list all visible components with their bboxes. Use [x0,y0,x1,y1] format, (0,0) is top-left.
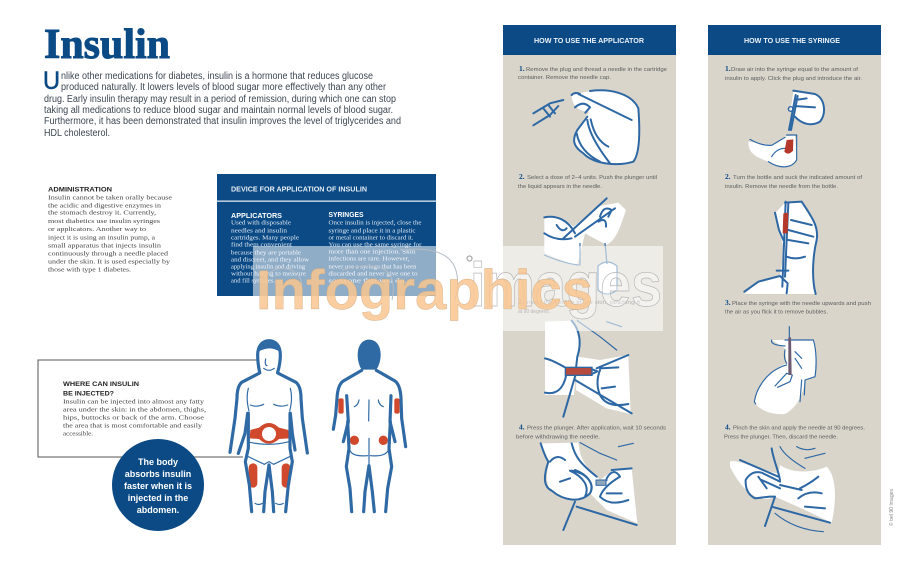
syringe step 3 text: 3. [725,298,731,307]
panel heading: DEVICE FOR APPLICATION OF INSULIN [231,186,367,194]
syringe header: HOW TO USE THE SYRINGE [744,38,840,45]
applicator step 3 text: at 90 degrees. [518,309,550,315]
callout circle: absorbs insulin [125,469,191,479]
applicator step 2 text: 2. [519,172,525,181]
applicator step 1 text: Remove the plug and thread a needle in the cartridge [526,67,667,73]
administration text block: ADMINISTRATION [48,186,112,194]
callout circle [112,439,204,531]
callout: where can insulin be injected: BE INJECTED? [63,390,114,398]
syringe step 4 illustration [730,447,835,532]
syringe step 1 text: 1. [725,64,731,73]
applicators column: without having to measure [231,270,306,278]
applicator step 4 text: 4. [519,422,525,432]
applicator step 3 text: 3. [518,297,524,306]
callout: where can insulin be injected: WHERE CAN INSULIN [63,381,139,388]
administration text block: those with type 1 diabetes. [48,266,131,274]
intro text block: taking all medications to reduce blood sugar and maintain normal levels of blood sugar. [44,105,393,116]
syringe step 3 text: Place the syringe with the needle upwards and push [732,301,871,307]
intro text block: drug. Early insulin therapy may result in a period of remission, during which one can stop [44,94,396,105]
callout: where can insulin be injected [38,360,257,457]
syringes column: someone that you do. [328,278,407,284]
applicator step 2 text [518,172,657,190]
callout circle: faster when it is [124,481,192,491]
syringe step 2 text: insulin. Remove the needle from the bottle. [725,184,838,190]
applicators column [231,213,309,284]
panel: how to use the applicator [503,25,676,545]
intro text block [43,67,401,139]
callout circle: abdomen. [137,505,179,515]
applicator step 3 illustration [545,321,632,417]
callout circle: injected in the [128,493,188,503]
applicator step 3 needle and cartridge [598,243,617,294]
applicator header [503,25,676,55]
callout: where can insulin be injected: hips, buttocks or back of the arm. Choose [63,414,204,422]
administration text block: continuously through a needle placed [48,250,169,258]
syringes column: or metal container to discard it. [328,234,414,242]
syringes column: Once insulin is injected, close the [328,220,422,226]
syringe header [708,25,881,55]
syringe step 4 text: Pinch the skin and apply the needle at 90 degrees. [733,426,865,432]
callout: where can insulin be injected: area under the skin: in the abdomen, thighs, [63,406,206,414]
administration text block: under the skin. It is used especially by [48,258,171,266]
administration text block: inject it is using an insulin pump, a [48,234,155,242]
body diagram: back [333,340,406,512]
applicator step 1 illustration [533,90,639,164]
syringes column: discarded and never give one to [328,270,418,278]
syringe step 1 text: Draw air into the syringe equal to the amount of [731,67,858,73]
applicators column: and discreet, and they allow [231,256,309,264]
syringes column [328,212,422,284]
callout: where can insulin be injected: Insulin can be injected into almost any fatty [63,398,205,406]
watermark: images [470,251,662,320]
applicator step 4 text [516,422,666,440]
syringes column: more than one injection. Skin [328,248,416,256]
syringe step 1 text: insulin to apply. Click the plug and introduce the air. [725,76,862,82]
callout circle: The body [138,457,178,467]
syringe step 4 text: Press the plunger. Then, discard the needle. [724,434,838,440]
syringes column: You can use the same syringe for [328,242,422,248]
applicator step 1 text: 1. [519,64,525,73]
applicators column: APPLICATORS [231,213,282,220]
syringe step 4 text [724,422,865,440]
syringes column: SYRINGES [328,212,364,219]
intro text block: U [43,67,60,95]
applicator step 2 illustration [544,198,626,265]
syringe step 2 text: 2. [725,172,731,181]
administration text block: Insulin cannot be taken orally because [48,194,172,202]
watermark [253,246,663,331]
title: Insulin [44,22,170,68]
intro text block: nlike other medications for diabetes, insulin is a hormone that reduces glucose [61,71,373,82]
administration text block: the acidic and digestive enzymes in [48,202,162,210]
syringe step 2 illustration [744,202,817,294]
applicator step 2 text: Select a dose of 2–4 units. Push the plunger until [527,175,657,181]
photo credit: © bel 90 Images [888,488,895,526]
syringe step 3 text [725,298,871,316]
syringe step 2 text: Turn the bottle and suck the indicated amount of [733,175,862,181]
applicators column: and fill syringes. [231,278,275,284]
syringe step 4 text: 4. [725,422,731,432]
syringe step 1 text [725,64,862,82]
body diagram: front [230,340,307,512]
applicators column: applying insulin and driving [231,264,306,270]
applicator step 3 text: Insert the needle in the skin, pinching it [525,300,641,306]
intro text block: Furthermore, it has been demonstrated that insulin improves the level of triglycerides and [44,116,401,127]
panel: device for application of insulin [217,174,436,296]
applicator step 4 text: Press the plunger. After application, wait 10 seconds [527,426,666,432]
applicator step 4 text: before withdrawing the needle. [516,434,600,440]
syringes column: infections are rare. However, [328,256,410,262]
syringe step 3 text: the air as you flick it to remove bubbles. [725,310,828,316]
administration text block: small apparatus that injects insulin [48,242,162,250]
applicator header: HOW TO USE THE APPLICATOR [534,38,644,45]
applicators column: cartridges. Many people [231,234,299,242]
intro text block: produced naturally. It lowers levels of blood sugar more effectively than any other [61,82,387,93]
applicator step 3 text [518,297,641,315]
administration text block [48,186,172,274]
applicator step 2 text: the liquid appears in the needle. [518,184,602,190]
intro text block: HDL cholesterol. [44,128,110,139]
watermark: Infographics [256,258,593,321]
administration text block: or applicators. Another way to [48,226,147,233]
panel: how to use the syringe [708,25,881,545]
syringe step 1 illustration [748,91,824,167]
applicator step 4 illustration [541,443,637,530]
callout: where can insulin be injected: accessible. [63,430,93,438]
applicators column: Used with disposable [231,220,291,226]
applicators column: because they are portable [231,250,301,256]
applicators column: needles and insulin [231,228,288,234]
administration text block: the stomach destroy it. Currently, [48,210,156,216]
callout: where can insulin be injected: the area that is most comfortable and easily [63,422,203,430]
syringes column: syringe and place it in a plastic [328,228,416,234]
syringe step 2 text [725,172,862,190]
applicator step 1 text [518,64,667,81]
applicators column: find them convenient [231,242,292,248]
syringe step 3 illustration [754,327,816,414]
administration text block: most diabetics use insulin syringes [48,218,161,225]
applicator step 1 text: container. Remove the needle cap. [518,75,611,81]
syringes column: never use a syringe that has been [328,264,417,270]
